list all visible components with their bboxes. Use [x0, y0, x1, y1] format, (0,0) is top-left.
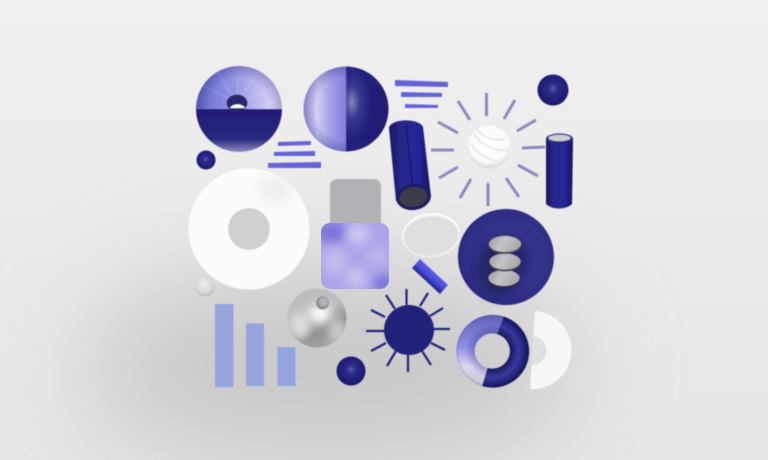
small navy ball: [196, 150, 216, 170]
navy plate with stacked silver discs: [458, 209, 554, 305]
navy sun icon: [366, 289, 450, 372]
navy cylinder right: [546, 134, 573, 208]
tilted navy cylinder: [389, 120, 433, 212]
illustration: floating 3D shapes: [32, 66, 628, 460]
ring split lilac and navy: [456, 315, 529, 388]
large white donut: [188, 168, 310, 290]
small blue tilted cylinder: [412, 259, 448, 294]
grey rounded tile: [330, 179, 381, 239]
white tilted ellipse disc: [400, 210, 462, 260]
stacked bars left: [268, 141, 321, 168]
bar chart: [215, 304, 296, 387]
navy ball bottom: [336, 356, 366, 386]
sphere with fan top and navy bottom: [196, 66, 282, 152]
white twisted ball with rays: [431, 93, 545, 206]
stacked bars right: [395, 80, 448, 108]
lilac cloudy rounded tile: [321, 223, 389, 289]
silver sphere: [288, 288, 346, 348]
small white ball: [196, 278, 214, 296]
navy ball top right: [538, 74, 568, 106]
white half disc: [530, 311, 572, 389]
sphere split lilac and navy: [304, 66, 388, 152]
